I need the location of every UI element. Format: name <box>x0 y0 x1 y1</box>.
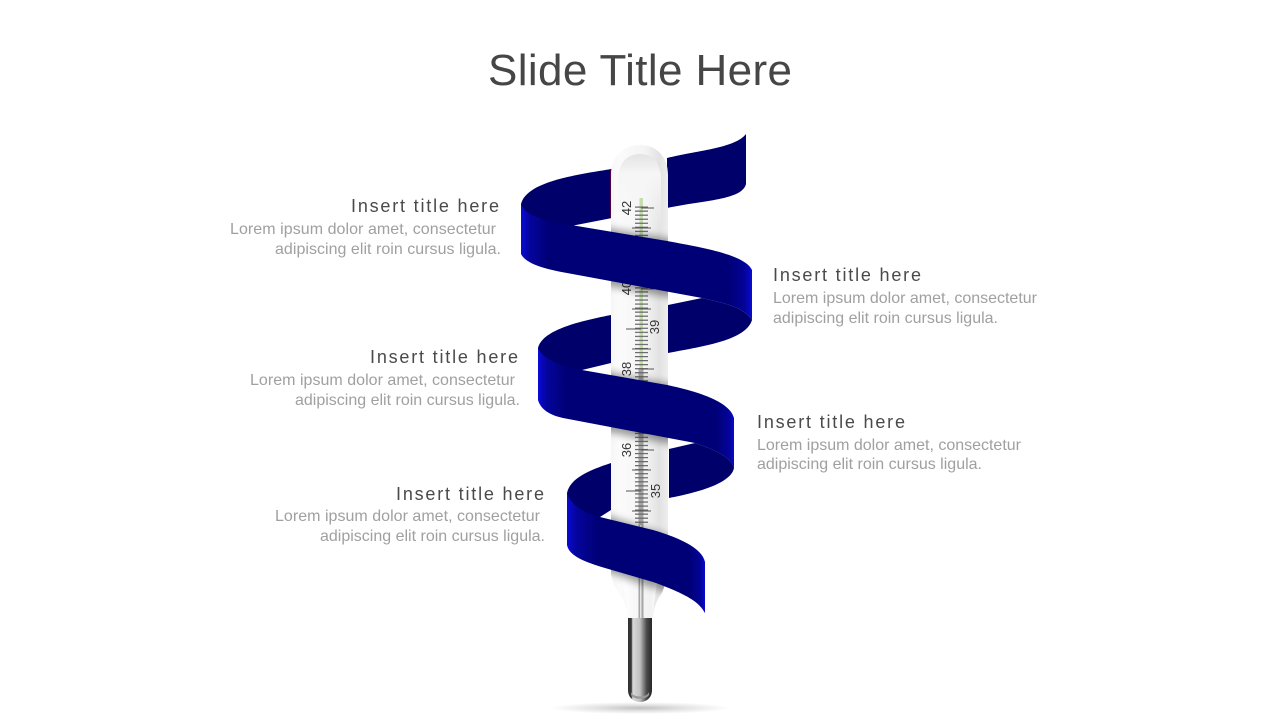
text block: top left: Insert title here <box>351 196 499 216</box>
text block: middle left <box>250 347 520 409</box>
text block: top right: adipiscing elit roin cursus ligula. <box>773 310 998 327</box>
scale numbers: 40 <box>619 281 634 295</box>
ribbon shadows on thermometer <box>611 224 668 596</box>
red edge on ribbon <box>610 169 612 218</box>
scale numbers: 38 <box>619 362 634 376</box>
capillary lower <box>638 368 644 618</box>
bulb inner tip <box>631 692 649 699</box>
text block: middle right: Insert title here <box>757 412 905 432</box>
scale numbers: 35 <box>648 484 663 498</box>
bulb <box>628 618 652 702</box>
text block: middle left: Lorem ipsum dolor amet, consectetur <box>250 372 516 389</box>
text block: bottom left: adipiscing elit roin cursus ligula. <box>320 528 545 545</box>
text block: middle right: Lorem ipsum dolor amet, consectetur <box>757 437 1022 454</box>
scale ticks <box>635 206 648 524</box>
text block: middle left: adipiscing elit roin cursus ligula. <box>295 392 520 409</box>
text block: top left <box>230 196 501 258</box>
thermometer <box>611 145 668 702</box>
long ticks <box>626 208 654 511</box>
text block: top left: adipiscing elit roin cursus ligula. <box>275 241 501 258</box>
text block: middle right <box>757 412 1022 473</box>
scale numbers: 39 <box>647 320 662 334</box>
front ribbon band 2 <box>538 348 734 468</box>
front ribbon band 3 <box>567 493 705 613</box>
glass body <box>611 145 668 618</box>
text block: top left: Lorem ipsum dolor amet, consectetur <box>230 221 497 238</box>
text block: middle right: adipiscing elit roin cursus ligula. <box>757 456 982 473</box>
front ribbon band 1 <box>521 204 752 320</box>
text block: top right: Insert title here <box>773 265 921 285</box>
stem highlight <box>640 525 642 618</box>
ground shadow <box>550 702 730 714</box>
title: Slide Title Here <box>488 46 792 95</box>
scale numbers: 42 <box>619 201 634 215</box>
scale numbers <box>619 201 663 498</box>
text block: bottom left <box>275 484 545 545</box>
text block: middle left: Insert title here <box>370 347 518 367</box>
text block: bottom left: Lorem ipsum dolor amet, consectetur <box>275 508 541 525</box>
text block: bottom left: Insert title here <box>396 484 544 504</box>
text block: top right <box>773 265 1038 327</box>
text block: top right: Lorem ipsum dolor amet, consectetur <box>773 290 1038 307</box>
back ribbon segments <box>521 134 752 517</box>
scale numbers: 36 <box>619 443 634 457</box>
neck <box>622 576 658 618</box>
capillary <box>640 198 643 368</box>
inner cap highlight <box>618 154 661 235</box>
